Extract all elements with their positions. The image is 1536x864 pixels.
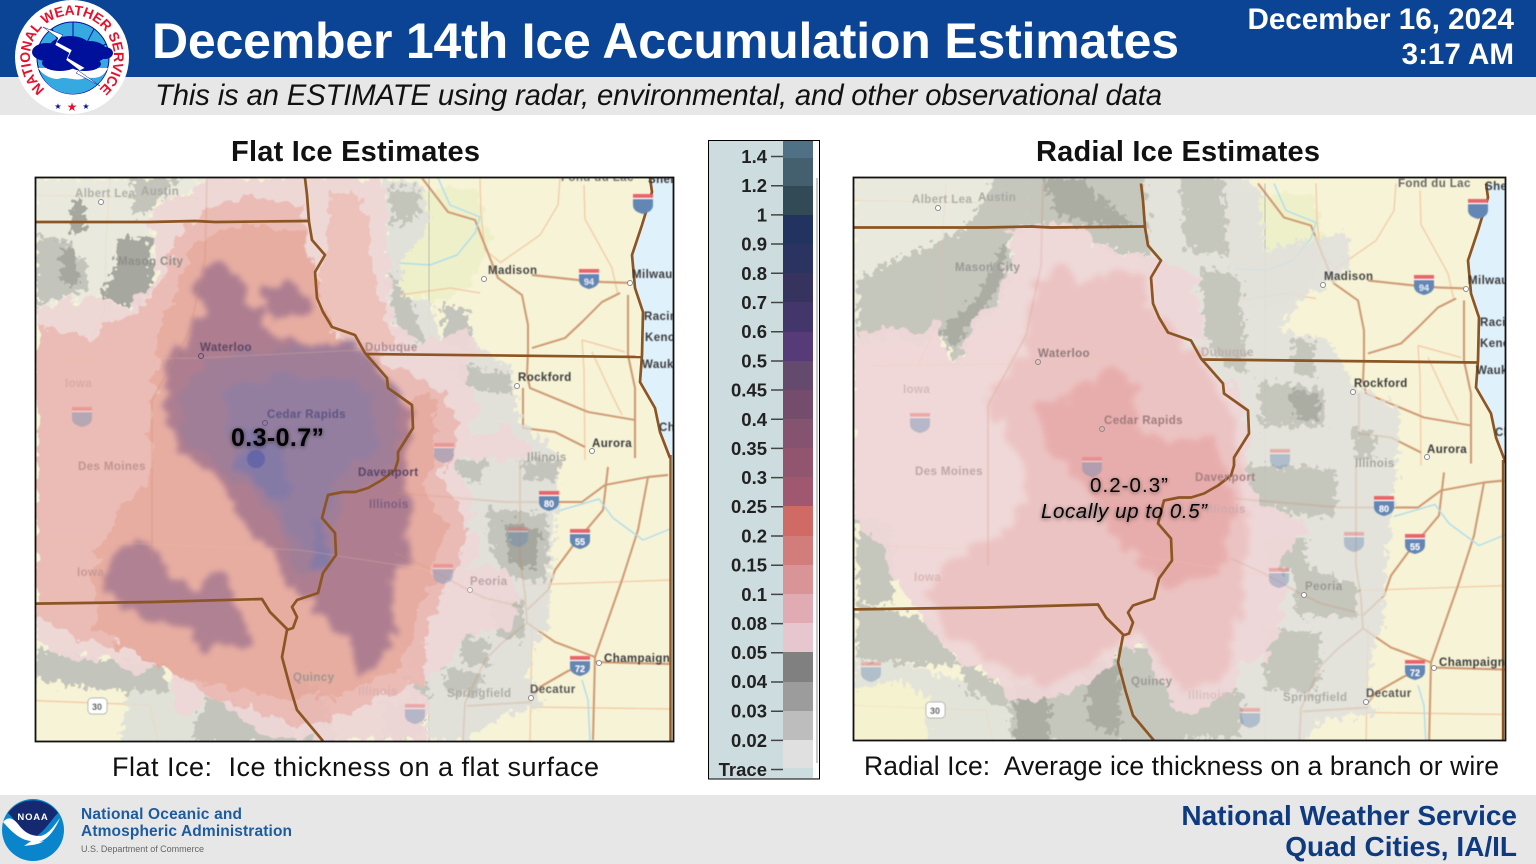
city labels: Madison bbox=[488, 265, 537, 277]
scale labels: 0.05 bbox=[731, 642, 767, 663]
scale labels: 0.04 bbox=[731, 671, 768, 692]
scale labels: 0.1 bbox=[741, 584, 767, 605]
city labels: Quincy bbox=[1131, 676, 1173, 688]
city labels: Aurora bbox=[592, 438, 632, 450]
heading: radial ice: Radial Ice Estimates bbox=[1036, 136, 1320, 168]
interstate shields: 94 bbox=[1419, 283, 1429, 293]
city labels: Quincy bbox=[293, 672, 335, 684]
city labels: Illinois bbox=[369, 499, 409, 511]
header band bbox=[0, 0, 1536, 115]
city labels: Decatur bbox=[1366, 688, 1412, 700]
city labels: Waterloo bbox=[1038, 348, 1090, 360]
city labels: Illinois bbox=[1355, 458, 1395, 470]
interstate shields: 80 bbox=[544, 499, 554, 509]
callout: flat ice range: 0.3-0.7” bbox=[231, 424, 324, 452]
text: NWS office: National Weather Service bbox=[1181, 800, 1517, 831]
interstate shields: 55 bbox=[575, 537, 585, 547]
scale labels: 0.9 bbox=[741, 234, 767, 254]
scale labels: 0.02 bbox=[731, 730, 767, 751]
scale labels: 0.35 bbox=[731, 438, 767, 459]
text: NOAA name: National Oceanic and bbox=[81, 806, 242, 823]
city labels: Dubuque bbox=[365, 342, 418, 354]
city labels: Mason City bbox=[955, 262, 1021, 274]
icon: NWS logo: NATIONAL WEATHER SERVICE bbox=[20, 5, 124, 96]
date and time: December 16, 2024 bbox=[1247, 3, 1515, 36]
icon: NWS logo: ★ bbox=[54, 102, 62, 111]
city labels: Champaign bbox=[1439, 657, 1505, 669]
scale labels: 0.15 bbox=[731, 554, 767, 576]
scale labels: 0.8 bbox=[741, 263, 767, 284]
city labels: Peoria bbox=[470, 576, 508, 588]
city labels: Madison bbox=[1324, 271, 1373, 283]
text: NWS office bbox=[1181, 800, 1517, 862]
city labels: Davenport bbox=[1195, 472, 1255, 484]
scale labels: 0.08 bbox=[731, 613, 767, 634]
text: NWS office: Quad Cities, IA/IL bbox=[1285, 831, 1517, 862]
interstate shields: 72 bbox=[575, 664, 585, 674]
interstate shields bbox=[861, 199, 1488, 728]
scale labels: 0.4 bbox=[741, 409, 768, 430]
city labels: Kenosha bbox=[1480, 338, 1532, 350]
heading: flat ice: Flat Ice Estimates bbox=[231, 136, 480, 168]
callout: radial ice range bbox=[1041, 474, 1208, 523]
interstate shields bbox=[72, 194, 653, 724]
date and time bbox=[1247, 3, 1515, 71]
interstate shields: 80 bbox=[1379, 504, 1389, 514]
scale labels: 0.5 bbox=[741, 350, 767, 372]
text: NOAA name bbox=[81, 806, 292, 854]
city labels: Mason City bbox=[118, 256, 184, 268]
scale labels: 0.3 bbox=[741, 467, 767, 488]
scale labels bbox=[719, 146, 768, 780]
footer band bbox=[0, 795, 1536, 864]
city labels: Iowa bbox=[903, 384, 930, 396]
interstate shields: 72 bbox=[1410, 668, 1420, 678]
city labels: Chicago bbox=[659, 422, 707, 434]
city labels: Austin bbox=[141, 186, 179, 198]
city labels bbox=[65, 172, 714, 700]
city markers bbox=[98, 200, 632, 700]
caption: radial ice: Radial Ice: Average ice thickness on a branch or wire bbox=[864, 751, 1499, 781]
city labels: Des Moines bbox=[78, 461, 146, 473]
city labels: Milwaukee bbox=[1468, 275, 1529, 287]
city labels: Dubuque bbox=[1201, 347, 1254, 359]
city labels: Racine bbox=[644, 311, 684, 323]
city labels: Fond du Lac bbox=[1398, 178, 1471, 190]
city labels: Albert Lea bbox=[912, 194, 972, 206]
city labels: Fond du Lac bbox=[561, 172, 634, 184]
scale labels: 0.2 bbox=[741, 526, 767, 546]
city labels: Aurora bbox=[1427, 444, 1467, 456]
city labels: Illinois bbox=[358, 686, 398, 698]
scale labels: 1.4 bbox=[741, 146, 768, 167]
city labels: Peoria bbox=[1305, 581, 1343, 593]
city labels: Iowa bbox=[65, 378, 92, 390]
city labels: Rockford bbox=[1354, 378, 1408, 390]
city labels: Iowa bbox=[77, 567, 104, 579]
city labels: Davenport bbox=[358, 467, 418, 479]
city labels: Waukegan bbox=[642, 359, 702, 371]
interstate shields: 94 bbox=[584, 277, 594, 287]
tick marks bbox=[771, 156, 783, 770]
subtitle: This is an ESTIMATE using radar, environmental, and other observational data bbox=[155, 79, 1162, 112]
city labels: Cedar Rapids bbox=[1104, 415, 1183, 427]
scale labels: 1 bbox=[757, 204, 767, 226]
city labels: Springfield bbox=[447, 688, 511, 700]
city labels: Springfield bbox=[1283, 692, 1347, 704]
scale labels: 0.7 bbox=[741, 292, 767, 313]
text: NOAA name: U.S. Department of Commerce bbox=[81, 844, 204, 854]
interstate shields: 55 bbox=[1410, 542, 1420, 552]
city labels: Waukegan bbox=[1476, 365, 1536, 377]
city labels: Racine bbox=[1480, 317, 1520, 329]
city labels: Waterloo bbox=[200, 342, 252, 354]
interstate shields: 30 bbox=[930, 706, 940, 716]
interstate shields: 30 bbox=[92, 702, 102, 712]
city labels: Des Moines bbox=[915, 466, 983, 478]
city labels: Cedar Rapids bbox=[267, 409, 346, 421]
city labels: Illinois bbox=[1188, 690, 1228, 702]
scale labels: Trace bbox=[719, 759, 767, 780]
city labels: Sheboygan bbox=[648, 174, 714, 186]
date and time: 3:17 AM bbox=[1402, 38, 1514, 71]
icon: NOAA logo: NOAA bbox=[17, 812, 49, 823]
city labels: Rockford bbox=[518, 372, 572, 384]
icon: NOAA logo bbox=[2, 799, 64, 861]
city labels: Albert Lea bbox=[75, 188, 135, 200]
scale labels: 1.2 bbox=[741, 175, 767, 196]
text: NOAA name: Atmospheric Administration bbox=[81, 823, 292, 840]
scale labels: 0.6 bbox=[741, 321, 767, 342]
panel: radial ice map bbox=[846, 172, 1536, 746]
scale labels: 0.03 bbox=[731, 700, 767, 722]
caption: flat ice: Flat Ice: Ice thickness on a flat surface bbox=[112, 752, 599, 782]
callout: radial ice range: 0.2-0.3” bbox=[1090, 474, 1168, 497]
color swatches bbox=[783, 141, 813, 768]
scale labels: 0.25 bbox=[731, 496, 767, 517]
callout: radial ice range: Locally up to 0.5” bbox=[1041, 500, 1208, 523]
city labels: Decatur bbox=[530, 684, 576, 696]
city labels: Kenosha bbox=[645, 332, 697, 344]
icon: NWS logo: ★ bbox=[67, 100, 77, 114]
city labels bbox=[903, 178, 1536, 704]
scale labels: 0.45 bbox=[731, 380, 767, 400]
legend: ice thickness color scale bbox=[708, 140, 820, 780]
city labels: Milwaukee bbox=[632, 269, 693, 281]
title: December 14th Ice Accumulation Estimates bbox=[152, 13, 1179, 69]
city labels: Illinois bbox=[527, 452, 567, 464]
city labels: Iowa bbox=[914, 572, 941, 584]
city labels: Austin bbox=[978, 192, 1016, 204]
icon: NWS logo: ★ bbox=[82, 102, 90, 111]
city markers bbox=[936, 206, 1468, 704]
panel: flat ice map bbox=[34, 176, 674, 742]
city labels: Champaign bbox=[604, 653, 670, 665]
city labels: Illinois bbox=[1206, 504, 1246, 516]
